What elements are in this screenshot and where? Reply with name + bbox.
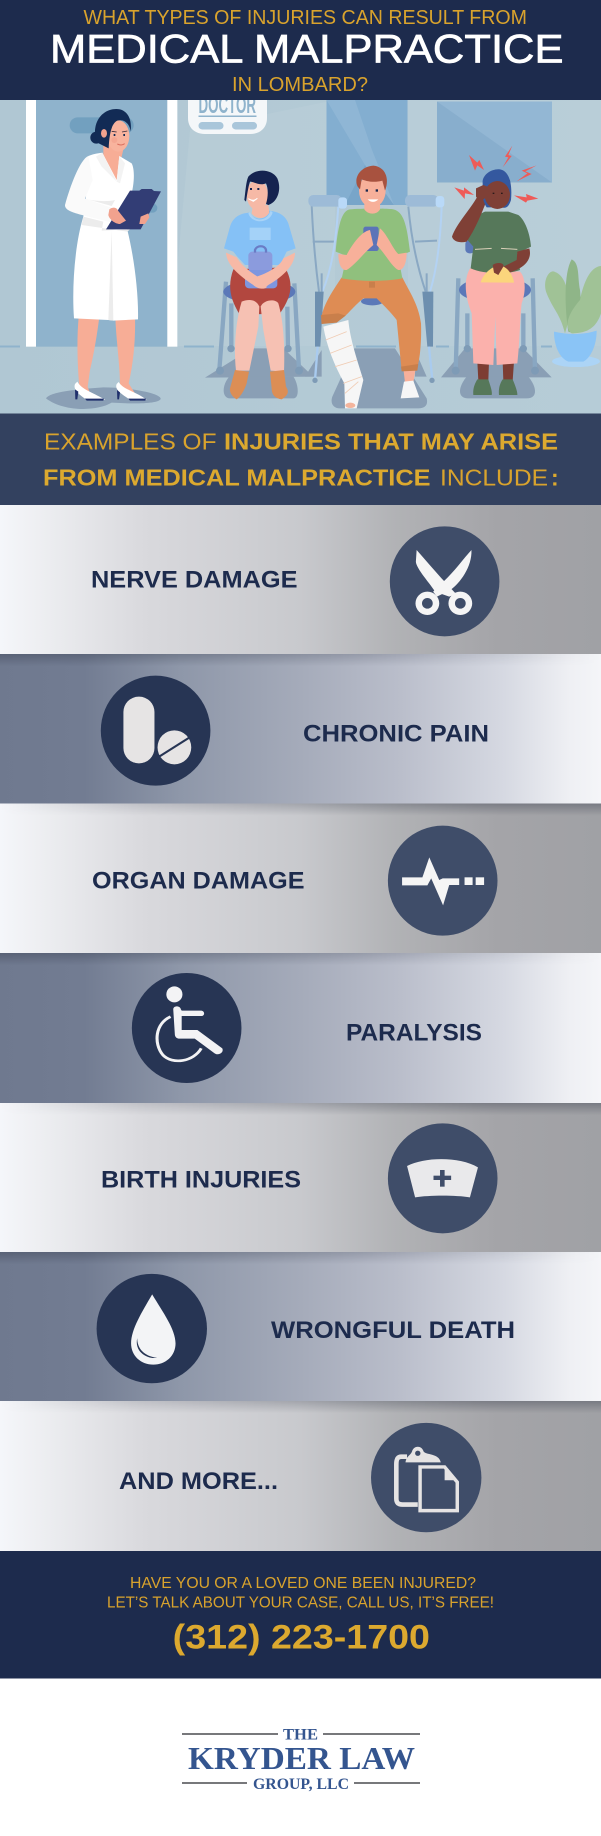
text: organ damage: ORGAN DAMAGE [92, 868, 304, 895]
right crutch [405, 195, 444, 383]
door sign: doctor: DOCTOR [198, 92, 256, 119]
patient: man with leg cast and crutches [305, 166, 444, 408]
call to action text: HAVE YOU OR A LOVED ONE BEEN INJURED? [130, 1575, 476, 1592]
icon: pills [101, 676, 210, 786]
icon: heartbeat [388, 826, 498, 936]
call to action footer: LET’S TALK ABOUT YOUR CASE, CALL US, IT’S FREE! [107, 1594, 494, 1611]
woman head [244, 171, 279, 210]
text: paralysis: PARALYSIS [346, 1020, 482, 1047]
potted plant [545, 259, 601, 367]
icon: nurse cap [388, 1123, 498, 1233]
chair [452, 240, 539, 375]
logo: the kryder law group: KRYDER LAW [188, 1740, 415, 1776]
left crutch [308, 195, 347, 383]
panel: organ damage [0, 804, 601, 953]
phone number: (312) 223-1700 [173, 1618, 430, 1656]
patient: woman with headache [441, 146, 601, 398]
window with light beams [326, 100, 408, 205]
panel: and more [0, 1401, 601, 1551]
woman head [476, 169, 511, 209]
text: nerve damage: NERVE DAMAGE [91, 567, 298, 594]
section heading: INJURIES THAT MAY ARISE [224, 428, 558, 454]
section heading: INCLUDE [440, 464, 548, 490]
doctor head [90, 109, 131, 152]
doctor figure [26, 100, 177, 409]
framed picture [437, 102, 552, 182]
text: chronic pain: CHRONIC PAIN [303, 721, 489, 748]
header band [0, 0, 601, 100]
section heading [0, 414, 601, 505]
logo: the kryder law group: THE [283, 1726, 318, 1743]
door [26, 100, 177, 347]
patient: woman with handbag [205, 171, 313, 399]
door sign: doctor [188, 100, 267, 134]
section heading: FROM MEDICAL MALPRACTICE [43, 464, 431, 490]
panel: wrongful death [0, 1252, 601, 1401]
icon: scissors [390, 526, 499, 636]
text: and more: AND MORE... [119, 1468, 278, 1495]
wall and floor background [0, 100, 601, 414]
heading line 2: MEDICAL MALPRACTICE [50, 27, 564, 71]
icon: wheelchair [132, 973, 241, 1083]
panel: chronic pain [0, 654, 601, 804]
text: wrongful death: WRONGFUL DEATH [271, 1317, 515, 1344]
section heading: : [551, 464, 559, 490]
heading line 1: WHAT TYPES OF INJURIES CAN RESULT FROM [84, 7, 527, 29]
heading line 3: IN LOMBARD? [232, 74, 368, 96]
panel: birth injuries [0, 1103, 601, 1252]
panel: nerve damage [0, 505, 601, 654]
panel: paralysis [0, 953, 601, 1103]
logo: the kryder law group: GROUP, LLC [253, 1776, 349, 1793]
section heading: EXAMPLES OF [44, 428, 217, 454]
illustration: hospital waiting room [0, 92, 601, 414]
pain bolts [454, 146, 538, 203]
text: birth injuries: BIRTH INJURIES [101, 1167, 301, 1194]
logo: the kryder law group [182, 1726, 420, 1793]
chair [216, 280, 303, 375]
icon: drop [97, 1274, 207, 1383]
man head [356, 166, 387, 214]
call to action footer [0, 1551, 601, 1678]
icon: clipboard [371, 1423, 481, 1532]
